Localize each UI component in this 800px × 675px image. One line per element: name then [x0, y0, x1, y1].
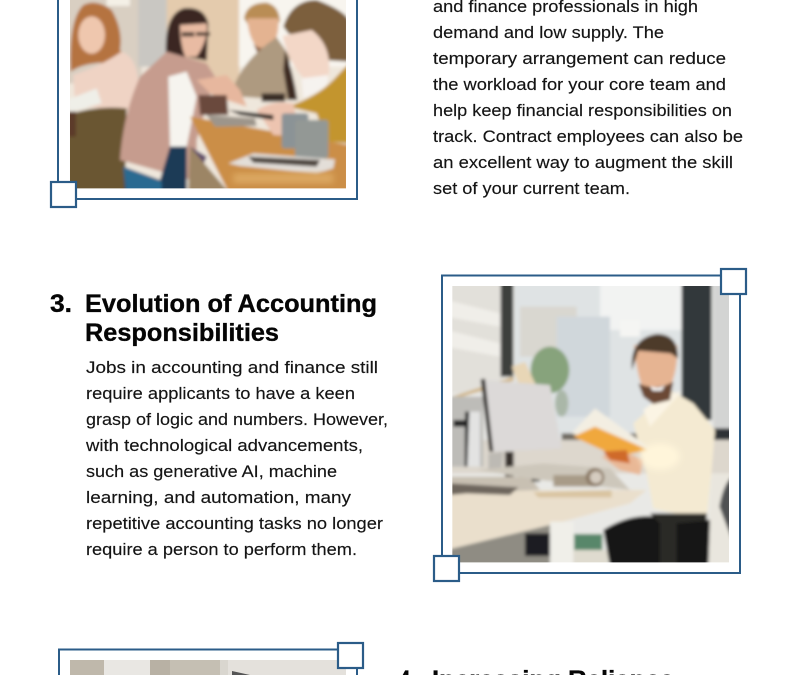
text block: section 3 body: with technological advancements,	[85, 436, 363, 455]
left woman	[70, 3, 123, 72]
panel: section 2 body text: demand and low supply. The	[433, 23, 664, 42]
text block: section 3 body: require applicants to have a keen	[86, 384, 355, 403]
right woman	[283, 0, 349, 62]
text block: section 3 body: such as generative AI, machine	[86, 462, 337, 481]
panel: section 2 body text: temporary arrangement can reduce	[433, 49, 726, 68]
desk	[447, 490, 647, 550]
photo: team around a laptop at a wooden table	[67, 0, 350, 193]
panel: section 2 body text	[433, 0, 743, 198]
panel: section 2 body text: an excellent way to augment the skill	[433, 153, 733, 172]
text block: section 3 body	[85, 358, 388, 559]
corner square: bottom left	[51, 182, 76, 207]
panel: section 4 photo frame	[59, 643, 363, 675]
under desk	[452, 524, 552, 562]
panel: section 2 body text: track. Contract employees can also be	[433, 127, 743, 146]
corner square: top right	[338, 643, 363, 668]
heading: section 3: Evolution of Accounting	[85, 290, 377, 318]
panel: section 2 team photo	[51, 0, 357, 207]
monitors	[447, 397, 483, 467]
panel: section 3 photo frame	[434, 269, 746, 581]
man	[603, 516, 710, 567]
central woman	[166, 8, 208, 61]
text block: section 3 body: grasp of logic and numbers. However,	[86, 410, 388, 429]
panel: section 2 body text: the workload for your core team and	[433, 75, 726, 94]
heading: section 3	[50, 290, 377, 347]
photo: smiling man reading at a desk	[447, 280, 733, 567]
heading: section 3: 3.	[50, 290, 72, 318]
heading: section 4	[402, 670, 670, 675]
man	[244, 3, 280, 25]
text block: section 3 body: Jobs in accounting and finance still	[86, 358, 378, 377]
lamp	[447, 377, 514, 402]
book	[572, 408, 645, 448]
text block: section 3 body: require a person to perform them.	[86, 540, 357, 559]
heading: section 3: Responsibilities	[85, 319, 279, 347]
chair and background	[710, 476, 728, 562]
text block: section 3 body: learning, and automation, many	[86, 488, 352, 507]
photo: section 4 top edge	[70, 660, 346, 675]
plant	[531, 347, 569, 393]
text block: section 3 body: repetitive accounting tasks no longer	[86, 514, 383, 533]
corner square: top right	[721, 269, 746, 294]
panel: section 2 body text: set of your current team.	[433, 179, 630, 198]
corner square: bottom left	[434, 556, 459, 581]
panel: section 2 body text: help keep financial responsibilities on	[433, 101, 732, 120]
table and objects	[190, 117, 349, 192]
